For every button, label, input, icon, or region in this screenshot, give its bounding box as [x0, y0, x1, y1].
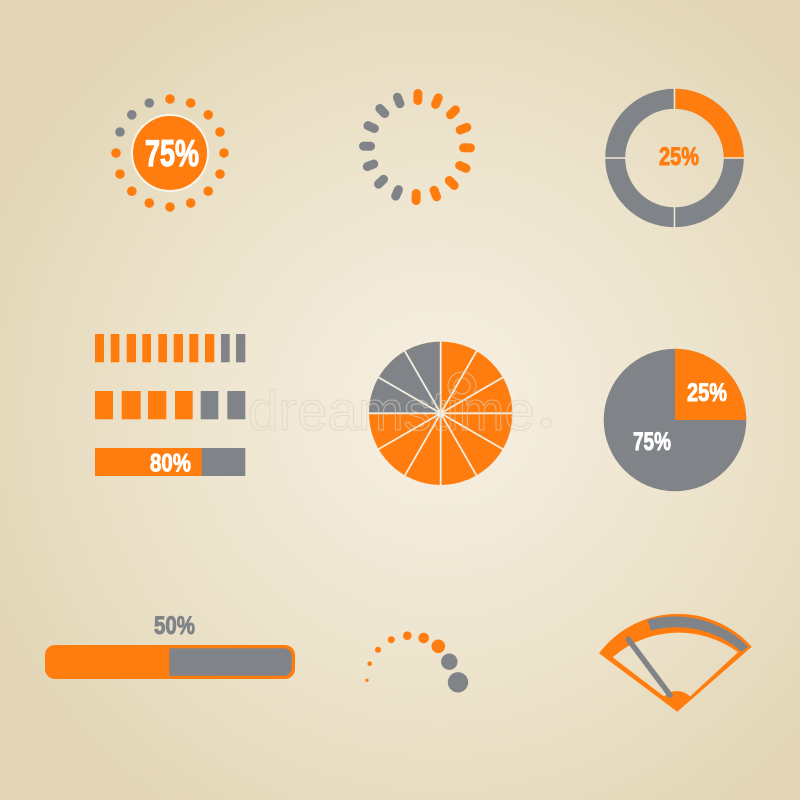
wide segment bar: [95, 391, 245, 419]
donut orange quarter: [674, 99, 734, 158]
gauge frame: [599, 614, 752, 712]
panel: dotted ring 75%: [111, 94, 229, 212]
solid bar 80%: 80%: [150, 450, 191, 478]
slice dividers: [369, 342, 512, 485]
orange quadrant: [675, 349, 746, 420]
gauge grey band: [647, 616, 748, 652]
bar track: [45, 645, 295, 679]
panel: fan gauge: [599, 614, 752, 712]
label 75%: 75%: [633, 428, 671, 456]
donut grey ring: [615, 99, 734, 217]
label 25%: 25%: [687, 379, 727, 407]
panel: growing dots arc: [365, 631, 468, 692]
panel: pie 25/75: [604, 349, 746, 491]
label 50%: 50%: [154, 612, 195, 640]
centre disc: [132, 115, 208, 191]
panel: spinner: [358, 88, 476, 206]
orange pills: [411, 89, 476, 206]
narrow segment bar: [95, 334, 245, 362]
solid bar 80%: [95, 448, 245, 478]
donut label 25%: 25%: [659, 143, 699, 171]
panel: bar gauges: [95, 334, 245, 478]
panel: progress bar 50%: [45, 612, 295, 679]
dot ring: [111, 94, 229, 212]
orange base disc: [369, 342, 512, 485]
grey disc: [604, 349, 746, 491]
label 75%: 75%: [145, 133, 199, 174]
panel: segmented pie: [369, 342, 512, 485]
grey quarter: [369, 342, 441, 413]
gauge needle: [628, 639, 670, 695]
grey pills: [358, 91, 406, 202]
bar grey remainder: [169, 648, 292, 676]
watermark: dreamstime: [248, 379, 535, 442]
panel: donut 25%: [615, 99, 734, 217]
